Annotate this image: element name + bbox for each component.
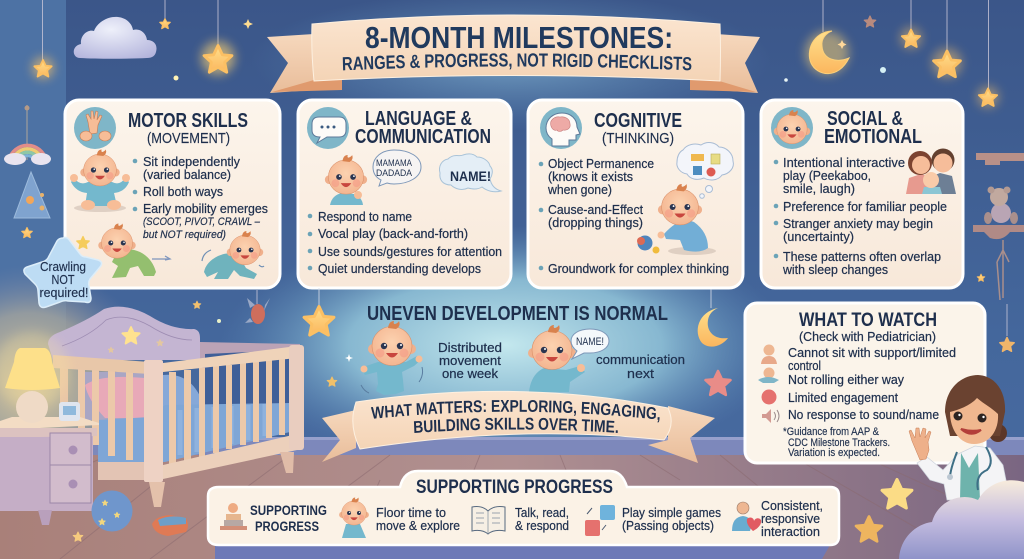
bullet list: Object Permanence: [548, 156, 654, 171]
illustration: baby moving: [360, 321, 423, 395]
bullet list: Preference for familiar people: [783, 199, 947, 214]
text: floor time: move & explore: [376, 518, 460, 533]
text: floor time: Floor time to: [376, 505, 446, 520]
bullet list: Respond to name: [318, 209, 412, 224]
text: distributed movement one week: Distributed: [438, 340, 502, 355]
bullet list: Cause-and-Effect: [548, 202, 643, 217]
panel: what to watch: [745, 303, 985, 463]
label: supporting progress: [250, 503, 327, 534]
callout: crawling not required: required!: [40, 286, 88, 300]
text: consistent responsive interaction: responsive: [761, 511, 820, 526]
icon: baby floor time: [339, 498, 369, 538]
banner: what matters: [322, 390, 715, 463]
nightstand and lamp: [0, 332, 99, 525]
bullet list: Quiet understanding develops: [318, 261, 481, 276]
text: talk read respond: [515, 505, 569, 533]
rug under supporting panel: [215, 545, 830, 559]
title banner: [267, 14, 760, 93]
heading: WHAT TO WATCH: [799, 310, 937, 331]
panel: social and emotional: [761, 100, 963, 288]
cloud: bottom right: [899, 480, 1024, 559]
bullet list: Stranger anxiety may begin: [783, 216, 933, 231]
floor stars: [856, 480, 912, 541]
bullet list: [539, 156, 729, 276]
panel: supporting progress: [208, 471, 839, 545]
bullet list: when gone): [547, 182, 612, 197]
bullet list: Sit independently: [143, 154, 240, 169]
line 2: BUILDING SKILLS OVER TIME.: [414, 418, 618, 433]
subheading: (MOVEMENT): [147, 130, 230, 147]
bullet list: (uncertainty): [783, 229, 854, 244]
title line 1: 8-MONTH MILESTONES:: [365, 20, 673, 55]
text: distributed movement one week: one week: [442, 366, 498, 381]
heading: SUPPORTING PROGRESS: [416, 477, 613, 498]
text: distributed movement one week: [438, 340, 502, 381]
hanging decorations: top right moon and stars: [784, 0, 999, 108]
footnote: *Guidance from AAP &: [783, 426, 880, 438]
checklist text: Limited engagement: [788, 390, 898, 405]
thought bubble: [677, 143, 733, 198]
icon: rolling baby: [758, 368, 779, 383]
bullet list: Groundwork for complex thinking: [548, 261, 729, 276]
icon: sitting baby: [761, 344, 777, 364]
callout: crawling not required: Crawling: [40, 260, 86, 274]
bullet list: play (Peekaboo,: [783, 168, 871, 183]
speech bubble: name: [439, 154, 501, 192]
illustration: thinking baby: [637, 184, 716, 255]
text: talk read respond: Talk, read,: [515, 505, 569, 520]
panel: social and emotional: EMOTIONAL: [824, 126, 922, 148]
text: distributed movement one week: movement: [439, 353, 501, 368]
callout: crawling not required: [24, 236, 102, 308]
icon: open book: [472, 506, 505, 534]
heading: SOCIAL &: [827, 108, 903, 130]
heading: uneven development is normal: UNEVEN DEVELOPMENT IS NORMAL: [367, 302, 668, 325]
illustration: family: [906, 148, 956, 194]
speech bubble: mamama dadada: MAMAMA: [376, 158, 412, 168]
bullet list: Early mobility emerges: [143, 201, 268, 216]
panel: motor skills: [65, 100, 280, 288]
icon: baby face: [771, 107, 813, 149]
title line 2: RANGES & PROGRESS, NOT RIGID CHECKLISTS: [342, 53, 692, 70]
text: consistent responsive interaction: [761, 498, 823, 539]
bullet list: (varied balance): [143, 167, 231, 182]
heading: LANGUAGE &: [365, 108, 472, 130]
label: supporting progress: PROGRESS: [255, 519, 319, 534]
icon: limited engagement: [762, 390, 776, 404]
illustration: babbling baby: [325, 155, 367, 205]
heading: MOTOR SKILLS: [128, 110, 248, 132]
text: consistent responsive interaction: interaction: [761, 524, 820, 539]
checklist text: [788, 345, 956, 422]
text: play simple games: [622, 505, 721, 533]
bullet list: (dropping things): [548, 215, 643, 230]
speech bubble: name: [571, 329, 609, 359]
bullet list: [308, 209, 502, 276]
illustration: doctor: [909, 375, 1010, 500]
bullet list: [774, 155, 947, 277]
bullet list: Roll both ways: [143, 184, 223, 199]
footnote: CDC Milestone Trackers.: [788, 437, 890, 449]
speech bubble: name: NAME!: [450, 168, 491, 184]
icon: speech bubble: [307, 107, 349, 149]
icon: speaker: [762, 409, 779, 423]
checklist text: No response to sound/name: [788, 407, 939, 422]
checklist text: control: [788, 358, 821, 373]
bullet list: with sleep changes: [782, 262, 888, 277]
illustration: crawling baby: [98, 224, 170, 278]
illustration: baby talking: [528, 325, 585, 392]
callout: crawling not required: NOT: [52, 273, 75, 287]
text: play simple games: (Passing objects): [622, 518, 714, 533]
speech bubble: name: NAME!: [576, 336, 604, 348]
crib: [48, 307, 304, 507]
icon: stacking toy: [220, 503, 247, 530]
illustration: sitting baby: [70, 150, 130, 212]
floor and baseboard: [0, 437, 1024, 559]
text: communication next: communication: [596, 352, 685, 367]
bullet list: [133, 154, 268, 241]
subheading: (Check with Pediatrician): [799, 329, 936, 344]
bullet list: Vocal play (back-and-forth): [318, 226, 468, 241]
bullet list: These patterns often overlap: [783, 249, 941, 264]
bullet list: smile, laugh): [783, 181, 855, 196]
hanging decorations: top left stars and cloud: [32, 0, 253, 80]
bullet list: Intentional interactive: [783, 155, 905, 170]
text: talk read respond: & respond: [515, 518, 569, 533]
bullet list: (knows it exists: [548, 169, 633, 184]
left wall hanging rainbow: [4, 105, 51, 238]
subheading: (THINKING): [602, 130, 674, 147]
text: communication next: next: [627, 366, 654, 381]
speech bubble: mamama dadada: [373, 150, 421, 186]
text: floor time: [376, 505, 460, 533]
footnote: [783, 426, 890, 459]
icon: hands: [74, 107, 116, 149]
checklist text: Not rolling either way: [788, 372, 904, 387]
panel: language and communication: [298, 100, 511, 288]
icon: passing objects: [585, 505, 615, 536]
text: communication next: [596, 352, 685, 381]
text: consistent responsive interaction: Consistent,: [761, 498, 823, 513]
panel: cognitive: [528, 100, 743, 288]
bullet list: Use sounds/gestures for attention: [318, 244, 502, 259]
speech bubble: mamama dadada: DADADA: [376, 168, 412, 178]
icon: person with heart: [732, 502, 761, 531]
label: supporting progress: SUPPORTING: [250, 503, 327, 518]
illustration: pivoting baby: [202, 231, 264, 279]
toys on floor: [73, 490, 188, 541]
bullet list: but NOT required): [143, 229, 226, 241]
bullet list: (SCOOT, PIVOT, CRAWL –: [143, 216, 261, 228]
icon: head with brain: [540, 107, 582, 149]
checklist text: Cannot sit with support/limited: [788, 345, 956, 360]
heading: COGNITIVE: [594, 110, 682, 132]
line 1: WHAT MATTERS: EXPLORING, ENGAGING,: [370, 400, 660, 422]
right wall shelves and teddy: [973, 153, 1024, 351]
panel: language and communication: COMMUNICATION: [355, 126, 491, 148]
footnote: Variation is expected.: [788, 447, 880, 459]
mobile toys: fish star and moon: [193, 288, 730, 395]
text: play simple games: Play simple games: [622, 505, 721, 520]
icon: cloud: [74, 17, 157, 59]
